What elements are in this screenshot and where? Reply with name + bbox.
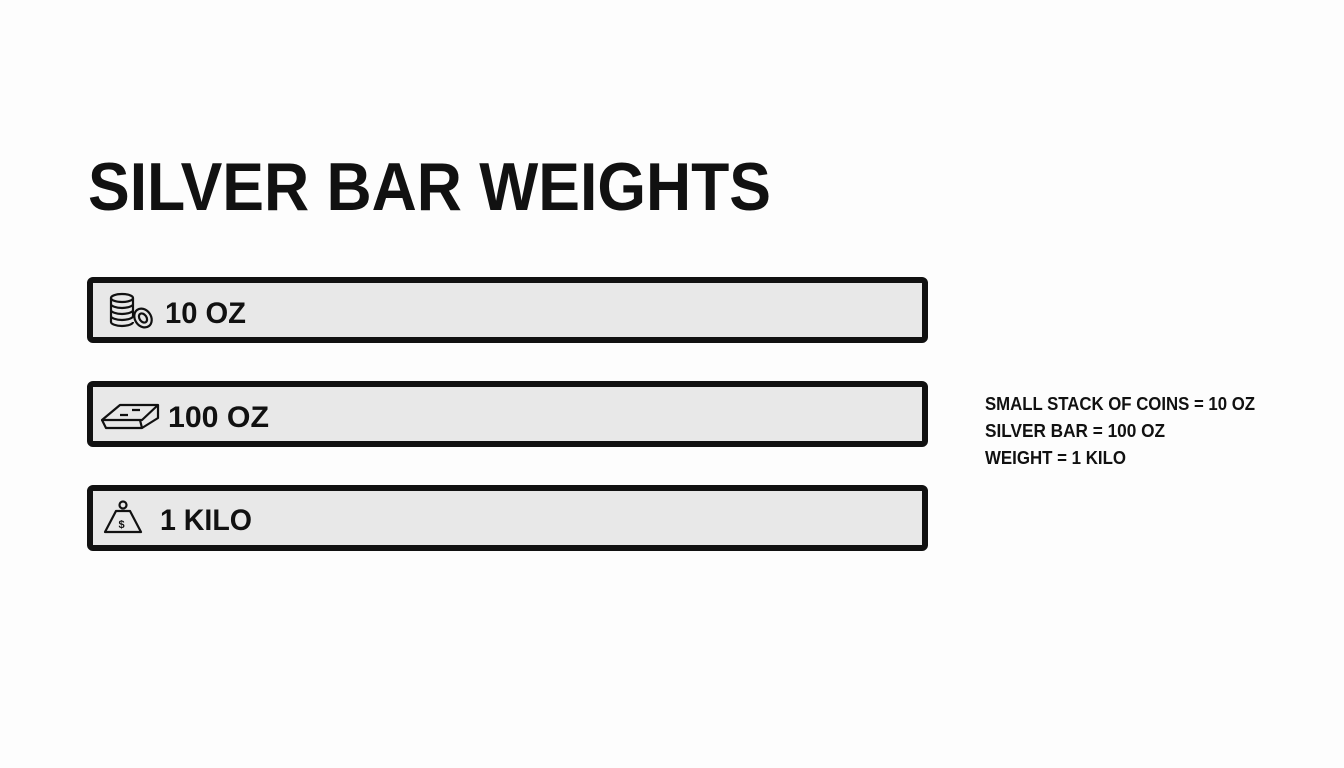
icon: silver bar [102,405,158,428]
title: SILVER BAR WEIGHTS [88,149,771,225]
bar: 1 kilo [90,488,925,548]
legend text: SMALL STACK OF COINS = 10 OZ [985,394,1255,414]
icon: weight: $ [118,519,125,531]
legend text: SILVER BAR = 100 OZ [985,421,1165,441]
icon: coin stack [111,294,155,331]
bar: 100 oz: 100 OZ [168,401,269,434]
legend text [985,394,1255,468]
legend text: WEIGHT = 1 KILO [985,448,1126,468]
bar: 10 oz [90,280,925,340]
bar: 10 oz: 10 OZ [165,297,246,330]
bar: 100 oz [90,384,925,444]
icon: weight [105,502,141,532]
bar: 1 kilo: 1 KILO [160,504,252,537]
